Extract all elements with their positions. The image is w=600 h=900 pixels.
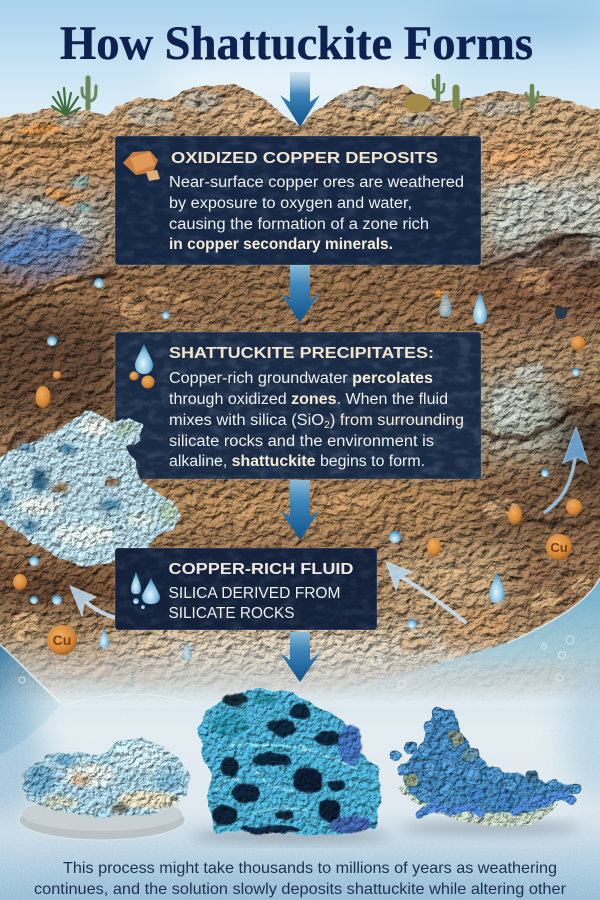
flow arrow: upper right [545, 427, 588, 512]
cactus right two [452, 88, 460, 106]
shrub [404, 94, 430, 112]
body text [168, 585, 340, 622]
copper nodule Cu right [546, 534, 572, 560]
copper nodule Cu left [47, 625, 77, 655]
body text: SILICATE ROCKS [168, 605, 294, 622]
icon: copper ore [123, 151, 160, 181]
copper nodule Cu right: Cu [550, 540, 568, 555]
title: How Shattuckite Forms [60, 17, 533, 70]
heading: OXIDIZED COPPER DEPOSITS [171, 150, 438, 167]
body text: mixes with silica (SiO [169, 412, 315, 429]
body text: Copper-rich groundwater percolates [169, 370, 433, 387]
flow arrow: lower left [70, 586, 140, 622]
body text: causing the formation of a zone rich [169, 216, 429, 233]
panel: oxidized copper deposits [115, 136, 481, 265]
lower area frost grain [0, 660, 600, 900]
lower area side tint [0, 660, 600, 900]
rock cobbles [0, 90, 600, 677]
body text: Near-surface copper ores are weathered [169, 174, 464, 191]
surface plants [52, 76, 538, 115]
heading: COPPER-RICH FLUID [168, 561, 354, 578]
arrow 1 [280, 72, 320, 127]
arrow 3 [280, 480, 320, 540]
cactus far right [526, 86, 538, 108]
water: left wave [0, 645, 60, 755]
copper nodules and droplets in soil [13, 278, 585, 660]
right specimen [390, 707, 580, 827]
arrow 4 [280, 632, 320, 682]
background: sky [0, 0, 600, 140]
strata lines [0, 138, 600, 600]
body text: ) from surrounding [330, 412, 464, 429]
glass dish [19, 797, 185, 840]
body text [169, 174, 464, 253]
body text: silicate rocks and the environment is [169, 433, 434, 450]
footer text: continues, and the solution slowly deposits shattuckite while altering other [34, 881, 567, 898]
arrow 2 [280, 265, 320, 322]
body text: 2 [324, 420, 330, 431]
icon: droplet and copper beads [130, 344, 154, 388]
panel: copper-rich fluid [115, 548, 377, 630]
sky haze [150, 0, 600, 106]
water droplets [29, 278, 580, 660]
ground: layered soil cross-section [0, 80, 600, 710]
panel: shattuckite precipitates [115, 332, 481, 479]
copper nodule Cu left: Cu [53, 632, 71, 648]
shadows [190, 822, 580, 842]
body text [169, 370, 464, 470]
cactus left [82, 78, 96, 108]
icon: droplets [131, 572, 160, 609]
heading: SHATTUCKITE PRECIPITATES: [169, 345, 434, 362]
middle specimen [198, 688, 380, 835]
cactus right one [433, 76, 444, 100]
specimen: large embedded shattuckite rock [0, 410, 182, 567]
body text: by exposure to oxygen and water, [169, 195, 412, 212]
footer text [34, 860, 567, 898]
flow arrow: lower right [386, 562, 465, 622]
body text: alkaline, shattuckite begins to form. [169, 453, 425, 470]
body text: in copper secondary minerals. [169, 236, 393, 253]
water: right wave [340, 578, 600, 702]
specimen group: three shattuckite samples [19, 688, 580, 842]
agave plant [52, 88, 80, 115]
body text: SILICA DERIVED FROM [168, 585, 340, 602]
small copper nodules [13, 336, 585, 590]
body text: through oxidized zones. When the fluid [169, 391, 448, 408]
water foam and bubbles [0, 578, 600, 704]
lower pale water and fog area [0, 640, 600, 900]
footer text: This process might take thousands to millions of years as weathering [63, 860, 557, 877]
left specimen [22, 737, 190, 818]
soil fade to fog [0, 632, 600, 708]
